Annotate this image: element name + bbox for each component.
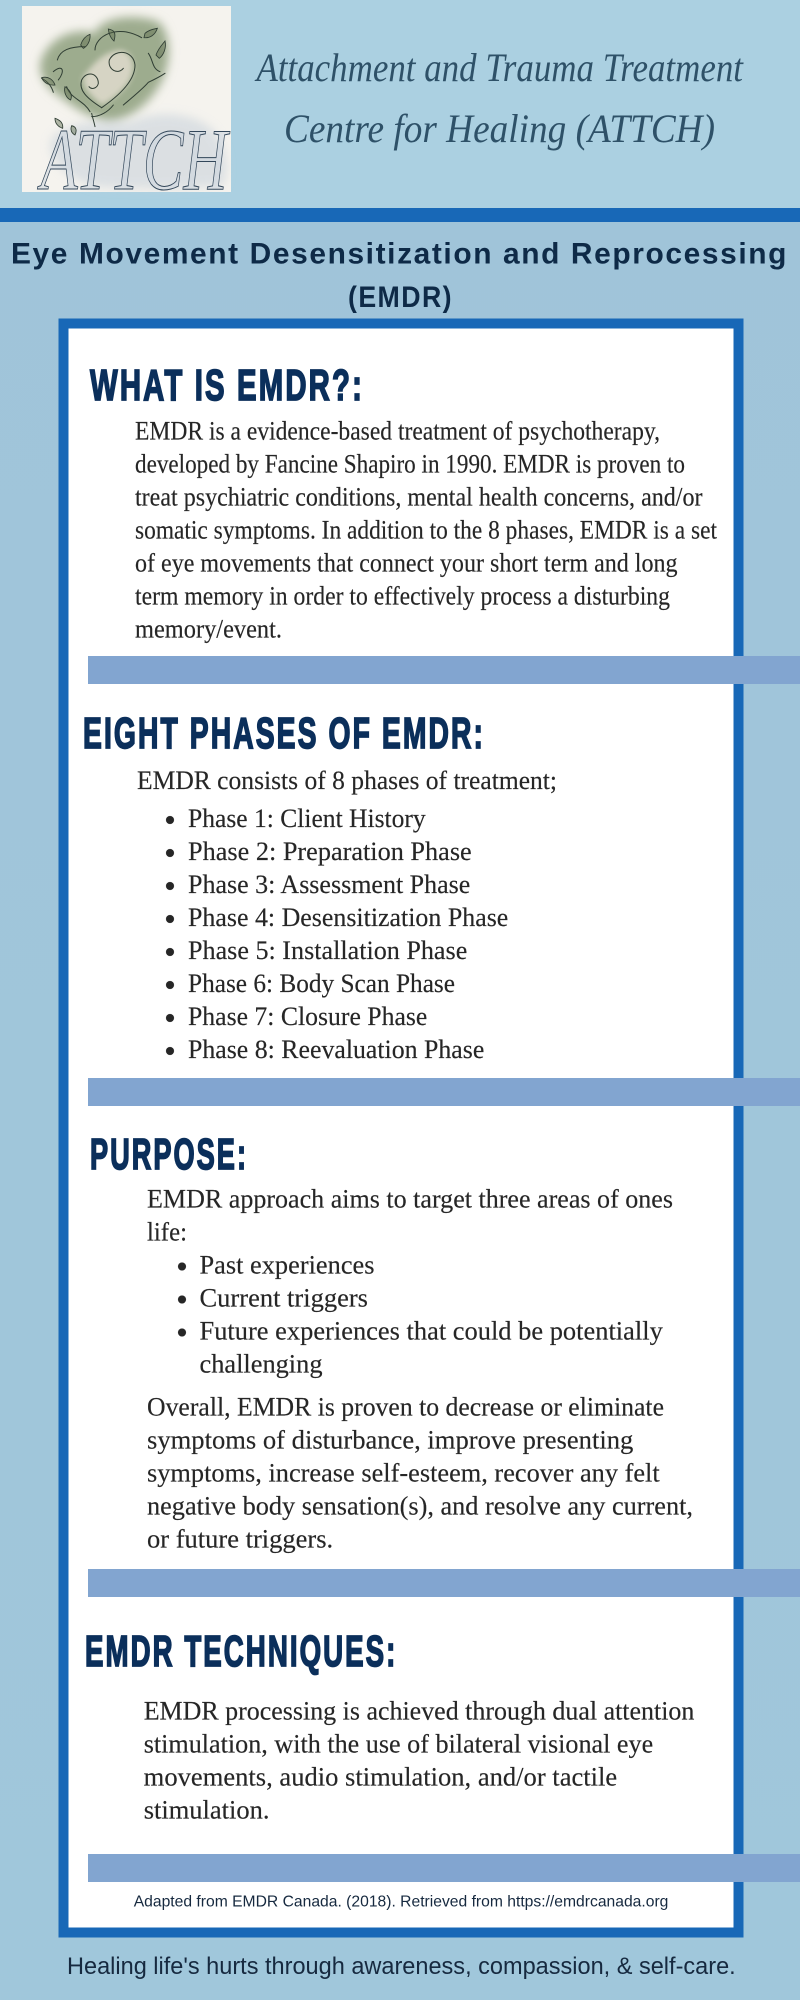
text block: definition: somatic symptoms. In addition to the 8 phases, EMDR is a set <box>135 514 718 544</box>
list: eight phases: Phase 3: Assessment Phase <box>188 869 470 899</box>
text block: definition <box>135 416 718 644</box>
list: eight phases: Phase 1: Client History <box>188 803 426 833</box>
text block: purpose intro: life: <box>147 1216 187 1246</box>
divider strip 1 <box>88 656 800 684</box>
text block: definition: term memory in order to effectively process a disturbing <box>135 580 670 610</box>
section: what is EMDR <box>90 362 718 644</box>
text block: techniques body: stimulation, with the use of bilateral visional eye <box>144 1728 653 1758</box>
text block: overall outcome: symptoms of disturbance, improve presenting <box>147 1424 633 1454</box>
list: target areas: challenging <box>200 1348 322 1378</box>
list: eight phases: Phase 2: Preparation Phase <box>188 836 472 866</box>
text block: definition: memory/event. <box>135 614 282 644</box>
list: eight phases: Phase 7: Closure Phase <box>188 1001 427 1031</box>
list: eight phases: Phase 6: Body Scan Phase <box>188 968 455 998</box>
panel: main content card <box>64 324 738 1932</box>
text block: techniques body: movements, audio stimulation, and/or tactile <box>144 1762 617 1792</box>
logo lettering: ATTCH <box>37 111 230 209</box>
list: target areas: Current triggers <box>200 1282 368 1312</box>
header divider bar <box>0 208 800 222</box>
list: eight phases: Phase 4: Desensitization Phase <box>188 902 508 932</box>
citation: Adapted from EMDR Canada. (2018). Retrieved from https://emdrcanada.org <box>134 1894 668 1911</box>
title: Eye Movement Desensitization and Reprocessing <box>11 238 788 270</box>
text block: overall outcome: negative body sensation(s), and resolve any current, <box>147 1490 693 1520</box>
list: target areas: Future experiences that could be potentially <box>200 1316 664 1346</box>
text block: techniques body <box>144 1696 694 1824</box>
section: purpose <box>90 1131 693 1554</box>
script heading <box>254 45 744 151</box>
list: target areas: Past experiences <box>200 1250 374 1280</box>
heading: purpose: PURPOSE: <box>90 1131 248 1179</box>
list: eight phases <box>166 803 508 1064</box>
script heading: Attachment and Trauma Treatment <box>254 45 744 90</box>
list: target areas <box>178 1250 664 1378</box>
header band <box>0 0 800 209</box>
logo: ATTCH heart tree <box>22 6 231 209</box>
list: eight phases: Phase 5: Installation Phase <box>188 935 467 965</box>
text block: techniques body: stimulation. <box>144 1794 270 1824</box>
divider strip 2 <box>88 1078 800 1106</box>
text block: definition: of eye movements that connect your short term and long <box>135 548 678 578</box>
section: eight phases <box>83 710 557 1064</box>
divider strip 4 <box>88 1854 800 1882</box>
heading: techniques: EMDR TECHNIQUES: <box>85 1628 397 1676</box>
list: eight phases: Phase 8: Reevaluation Phase <box>188 1034 484 1064</box>
text block: phases intro: EMDR consists of 8 phases of treatment; <box>137 765 557 795</box>
divider strip 3 <box>88 1569 800 1597</box>
title: (EMDR) <box>348 281 453 314</box>
script heading: Centre for Healing (ATTCH) <box>284 106 715 151</box>
text block: purpose intro: EMDR approach aims to target three areas of ones <box>147 1184 673 1214</box>
text block: overall outcome: or future triggers. <box>147 1524 333 1554</box>
text block: definition: EMDR is a evidence-based treatment of psychotherapy, <box>135 416 660 446</box>
text block: overall outcome: Overall, EMDR is proven to decrease or eliminate <box>147 1392 664 1422</box>
text block: techniques body: EMDR processing is achieved through dual attention <box>144 1696 694 1726</box>
tagline: Healing life's hurts through awareness, compassion, & self-care. <box>67 1953 736 1980</box>
heading: what is EMDR: WHAT IS EMDR?: <box>90 362 364 410</box>
text block: definition: treat psychiatric conditions, mental health concerns, and/or <box>135 482 703 512</box>
text block: overall outcome <box>147 1392 693 1554</box>
heading: eight phases: EIGHT PHASES OF EMDR: <box>83 710 485 758</box>
text block: overall outcome: symptoms, increase self-esteem, recover any felt <box>147 1458 660 1488</box>
section: techniques <box>85 1628 694 1824</box>
text block: definition: developed by Fancine Shapiro in 1990. EMDR is proven to <box>135 448 685 478</box>
text block: purpose intro <box>147 1184 673 1246</box>
title <box>11 238 788 314</box>
